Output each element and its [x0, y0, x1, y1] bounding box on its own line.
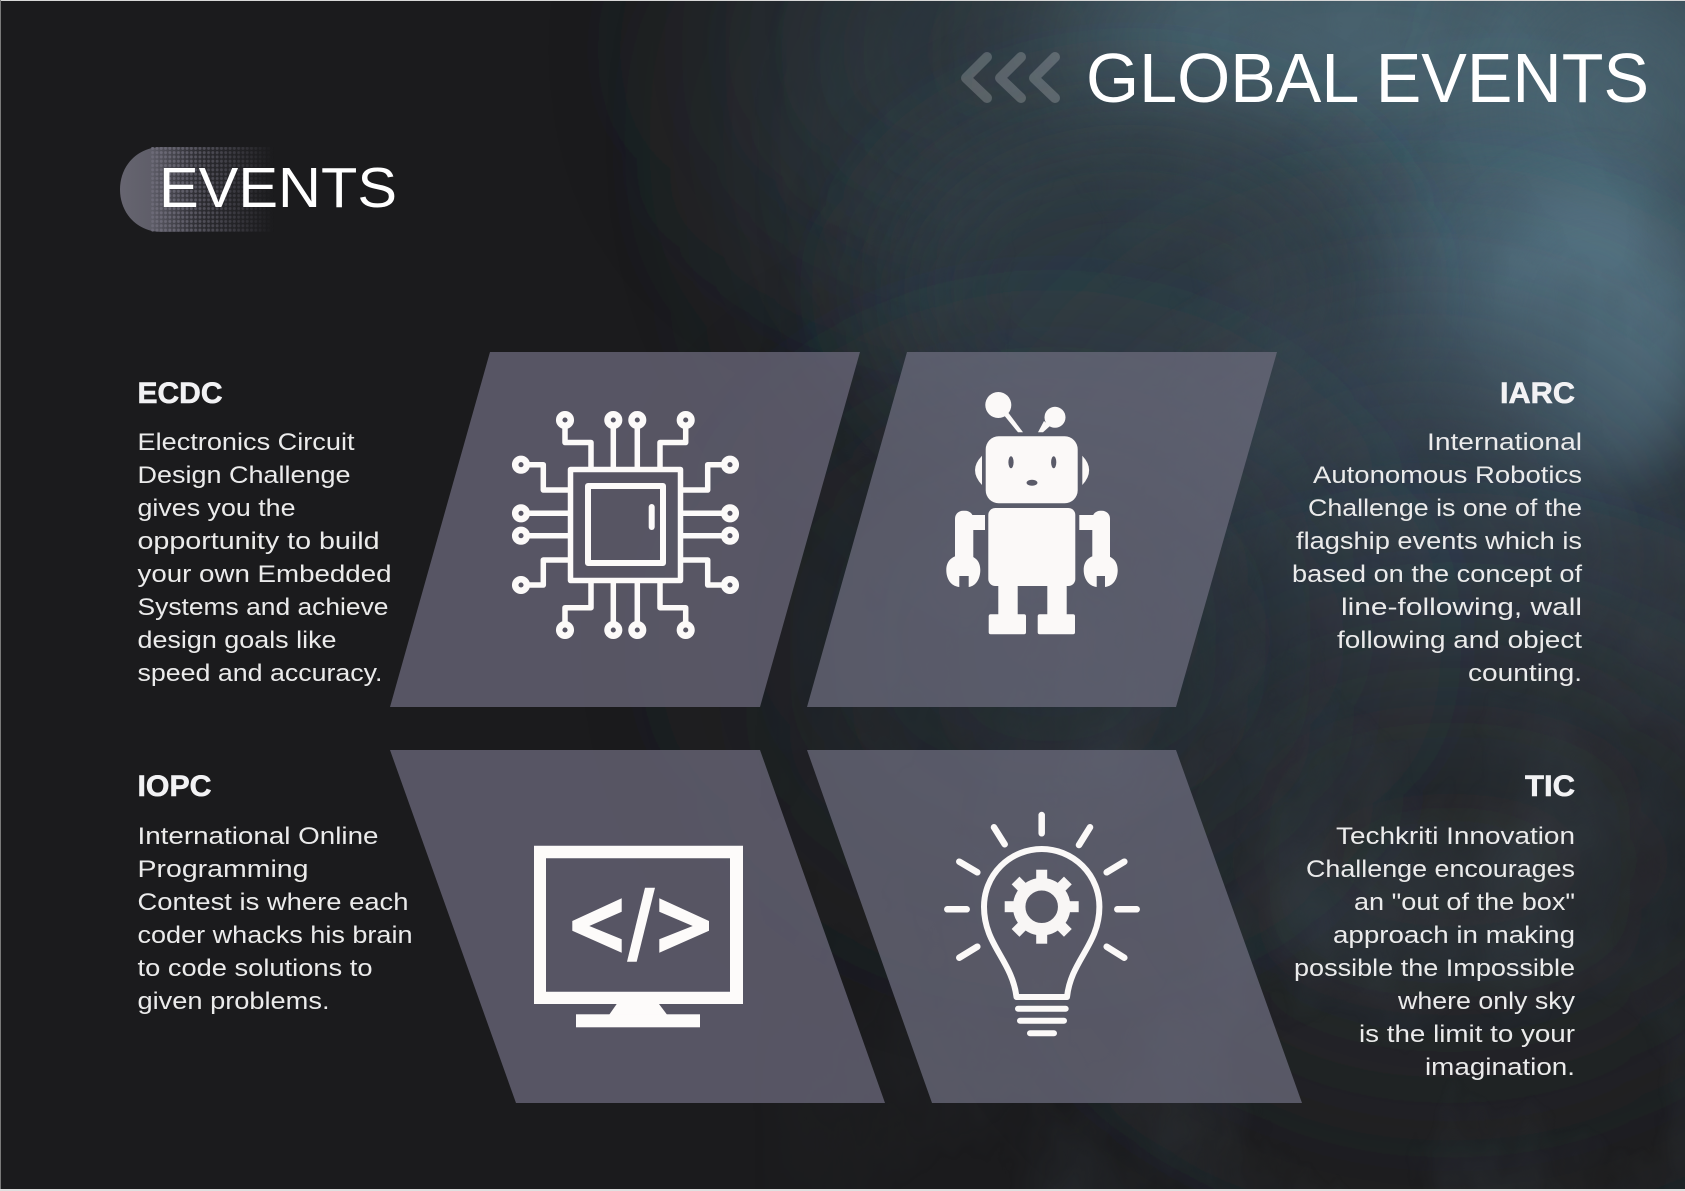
text block: IOPC: Contest is where each	[138, 889, 408, 916]
text block: IARC: Autonomous Robotics	[1313, 462, 1582, 489]
panel: IARC parallelogram	[807, 352, 1277, 707]
text block: IOPC: given problems.	[138, 988, 330, 1015]
icon: three left chevrons	[966, 57, 1055, 98]
text block: TIC: is the limit to your	[1359, 1021, 1575, 1048]
text block: ECDC: opportunity to build	[138, 528, 380, 555]
text block: ECDC	[138, 377, 392, 687]
text block: IARC: Challenge is one of the	[1308, 495, 1582, 522]
icon: light bulb with gear	[947, 815, 1137, 1033]
text block: ECDC: Design Challenge	[138, 462, 350, 489]
text block: IARC: IARC	[1500, 377, 1575, 410]
text block: ECDC: Electronics Circuit	[138, 429, 355, 456]
text block: IARC: counting.	[1468, 660, 1582, 687]
text block: ECDC: design goals like	[138, 627, 336, 654]
text block: ECDC: Systems and achieve	[138, 594, 388, 621]
text block: IARC: based on the concept of	[1292, 561, 1582, 588]
text block: ECDC: speed and accuracy.	[138, 660, 382, 687]
icon: monitor with code	[534, 846, 743, 1027]
text block: TIC: imagination.	[1425, 1054, 1575, 1081]
text block: TIC: Techkriti Innovation	[1336, 823, 1575, 850]
text block: IARC	[1292, 377, 1582, 687]
text block: TIC: where only sky	[1397, 988, 1575, 1015]
text block: ECDC: gives you the	[138, 495, 296, 522]
text block: IOPC: to code solutions to	[138, 955, 372, 982]
icon: robot	[946, 392, 1118, 634]
text block: IOPC	[138, 770, 412, 1015]
text block: IOPC: coder whacks his brain	[138, 922, 412, 949]
panel: ECDC parallelogram	[390, 352, 860, 707]
text block: IARC: line-following, wall	[1341, 594, 1582, 621]
title: GLOBAL EVENTS	[1086, 39, 1649, 117]
icon: circuit chip	[515, 414, 736, 636]
text block: TIC: possible the Impossible	[1294, 955, 1575, 982]
text block: IOPC: International Online	[138, 823, 378, 850]
text block: IARC: following and object	[1337, 627, 1582, 654]
text block: IOPC: Programming	[138, 856, 308, 883]
text block: TIC: approach in making	[1333, 922, 1575, 949]
text block: TIC	[1294, 770, 1575, 1081]
text block: IARC: International	[1427, 429, 1582, 456]
text block: TIC: Challenge encourages	[1306, 856, 1575, 883]
text block: ECDC: ECDC	[138, 377, 222, 410]
text block: IOPC: IOPC	[138, 770, 212, 803]
section heading: events pill	[120, 147, 397, 232]
text block: TIC: TIC	[1525, 770, 1575, 803]
text block: ECDC: your own Embedded	[138, 561, 392, 588]
panel: TIC parallelogram	[807, 750, 1302, 1103]
panel: IOPC parallelogram	[390, 750, 885, 1103]
text block: TIC: an "out of the box"	[1354, 889, 1575, 916]
text block: IARC: flagship events which is	[1296, 528, 1582, 555]
section heading: events pill: EVENTS	[159, 156, 397, 220]
